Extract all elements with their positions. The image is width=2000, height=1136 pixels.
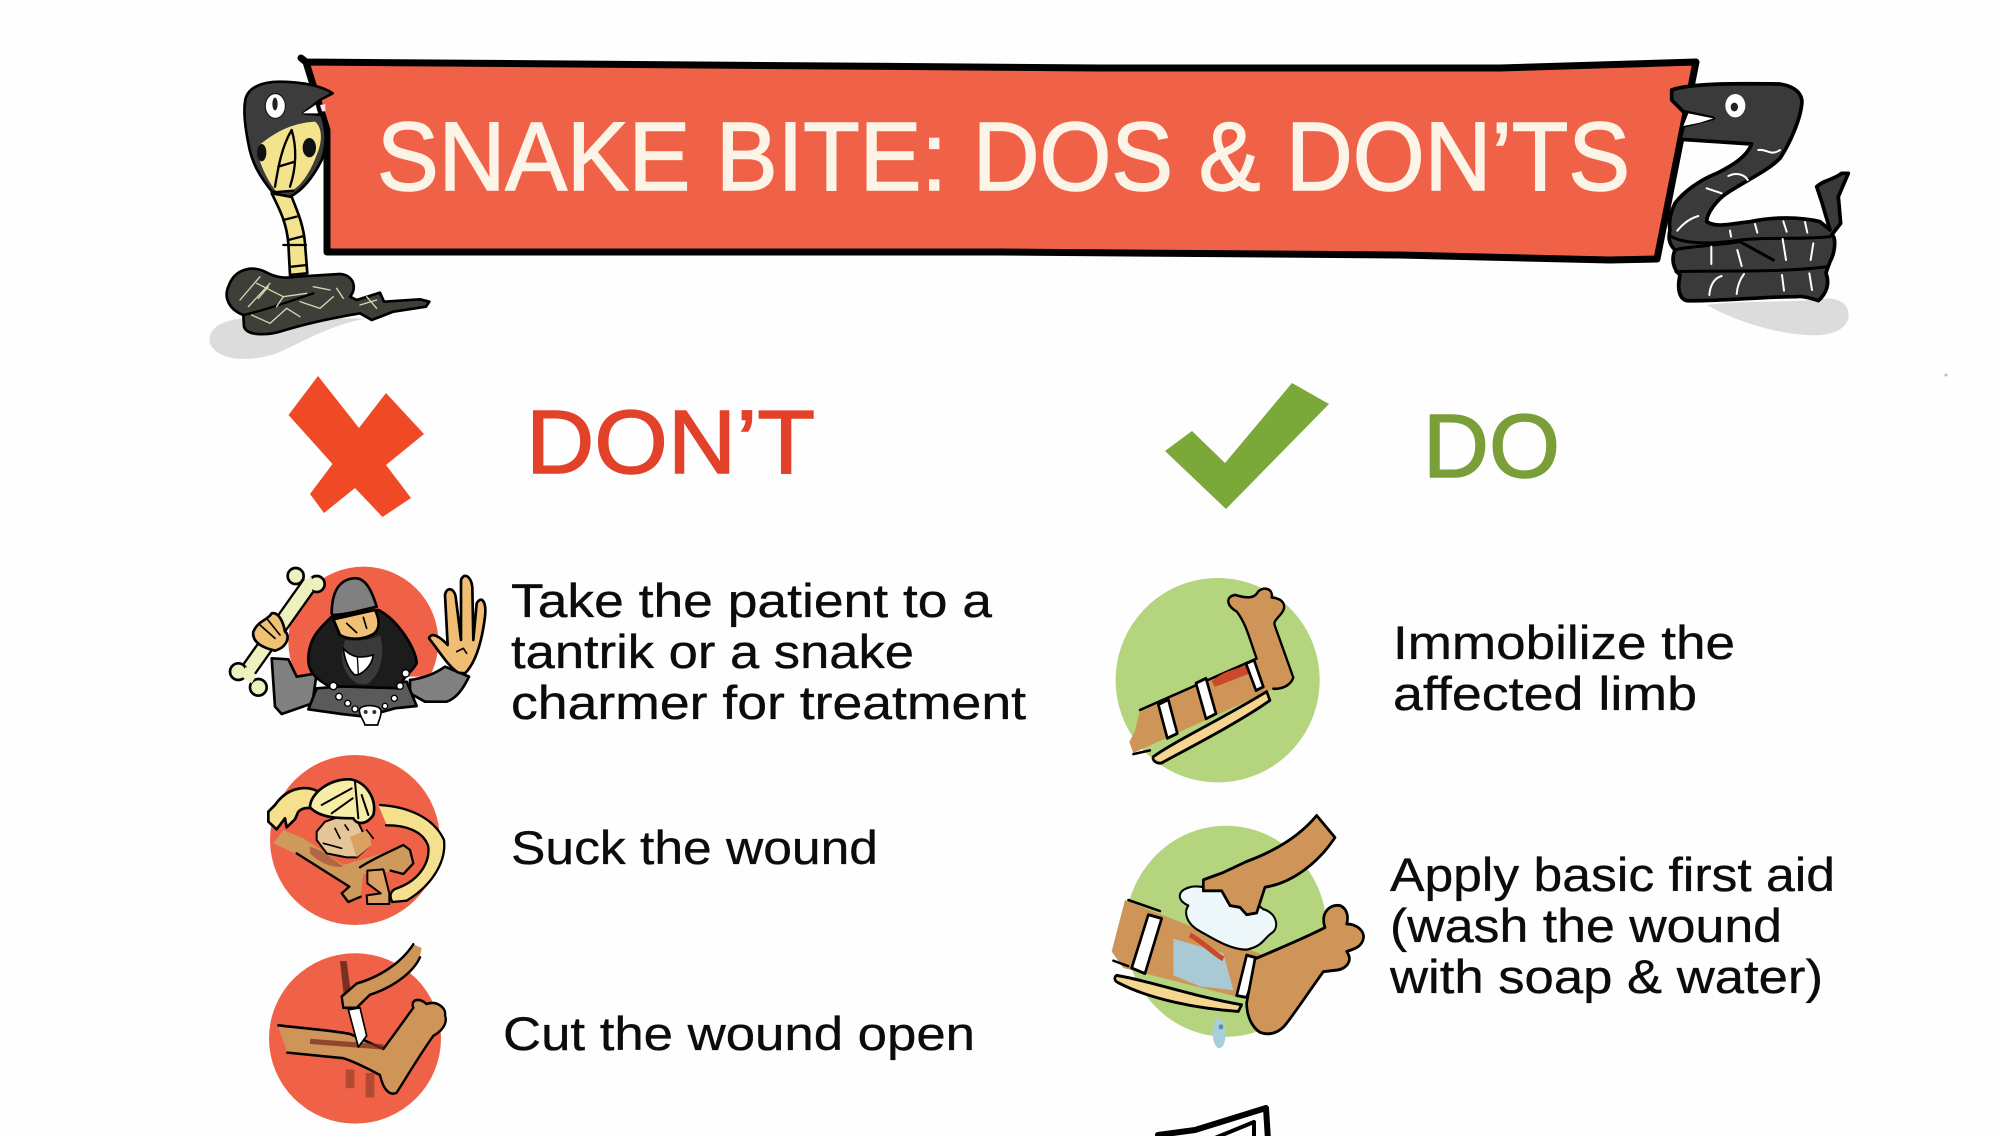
- text: tantrik: tantrik or a snake: [511, 625, 914, 678]
- text: immobilize: Immobilize the: [1393, 616, 1735, 669]
- do item 2: first aid: [1112, 815, 1839, 1048]
- don't item 1: tantrik: [230, 567, 1026, 729]
- icon: sucking the wound: [268, 755, 444, 925]
- text: tantrik: charmer for treatment: [511, 676, 1026, 729]
- text: first aid: with soap & water): [1389, 950, 1823, 1003]
- text: cut the wound: Cut the wound open: [503, 1007, 975, 1060]
- text: first aid: Apply basic first aid: [1390, 848, 1835, 901]
- heading: do: DO: [1423, 397, 1560, 497]
- icon: green check: [1165, 383, 1329, 509]
- text: suck the wound: Suck the wound: [511, 821, 878, 874]
- do item 1: immobilize: [1116, 578, 1739, 782]
- icon: splinted limb: [1116, 578, 1320, 782]
- title: SNAKE BITE: DOS & DON’TS: [377, 102, 1630, 211]
- icon: washing the wound: [1112, 815, 1364, 1048]
- don't item 2: suck the wound: [268, 755, 878, 925]
- icon: right krait: [1669, 84, 1849, 335]
- heading: don't: DON’T: [526, 393, 815, 493]
- icon: red cross: [288, 376, 424, 517]
- text: tantrik: Take the patient to a: [511, 574, 993, 627]
- icon: partial cropped illustration: [1158, 1108, 1268, 1136]
- icon: left cobra: [209, 82, 429, 359]
- don't item 3: cut the wound: [269, 944, 975, 1124]
- text: immobilize: affected limb: [1393, 667, 1697, 720]
- icon: tantrik with bone: [230, 567, 485, 725]
- banner with title: [301, 58, 1696, 260]
- text: first aid: (wash the wound: [1390, 899, 1782, 952]
- icon: cutting the wound: [269, 944, 446, 1124]
